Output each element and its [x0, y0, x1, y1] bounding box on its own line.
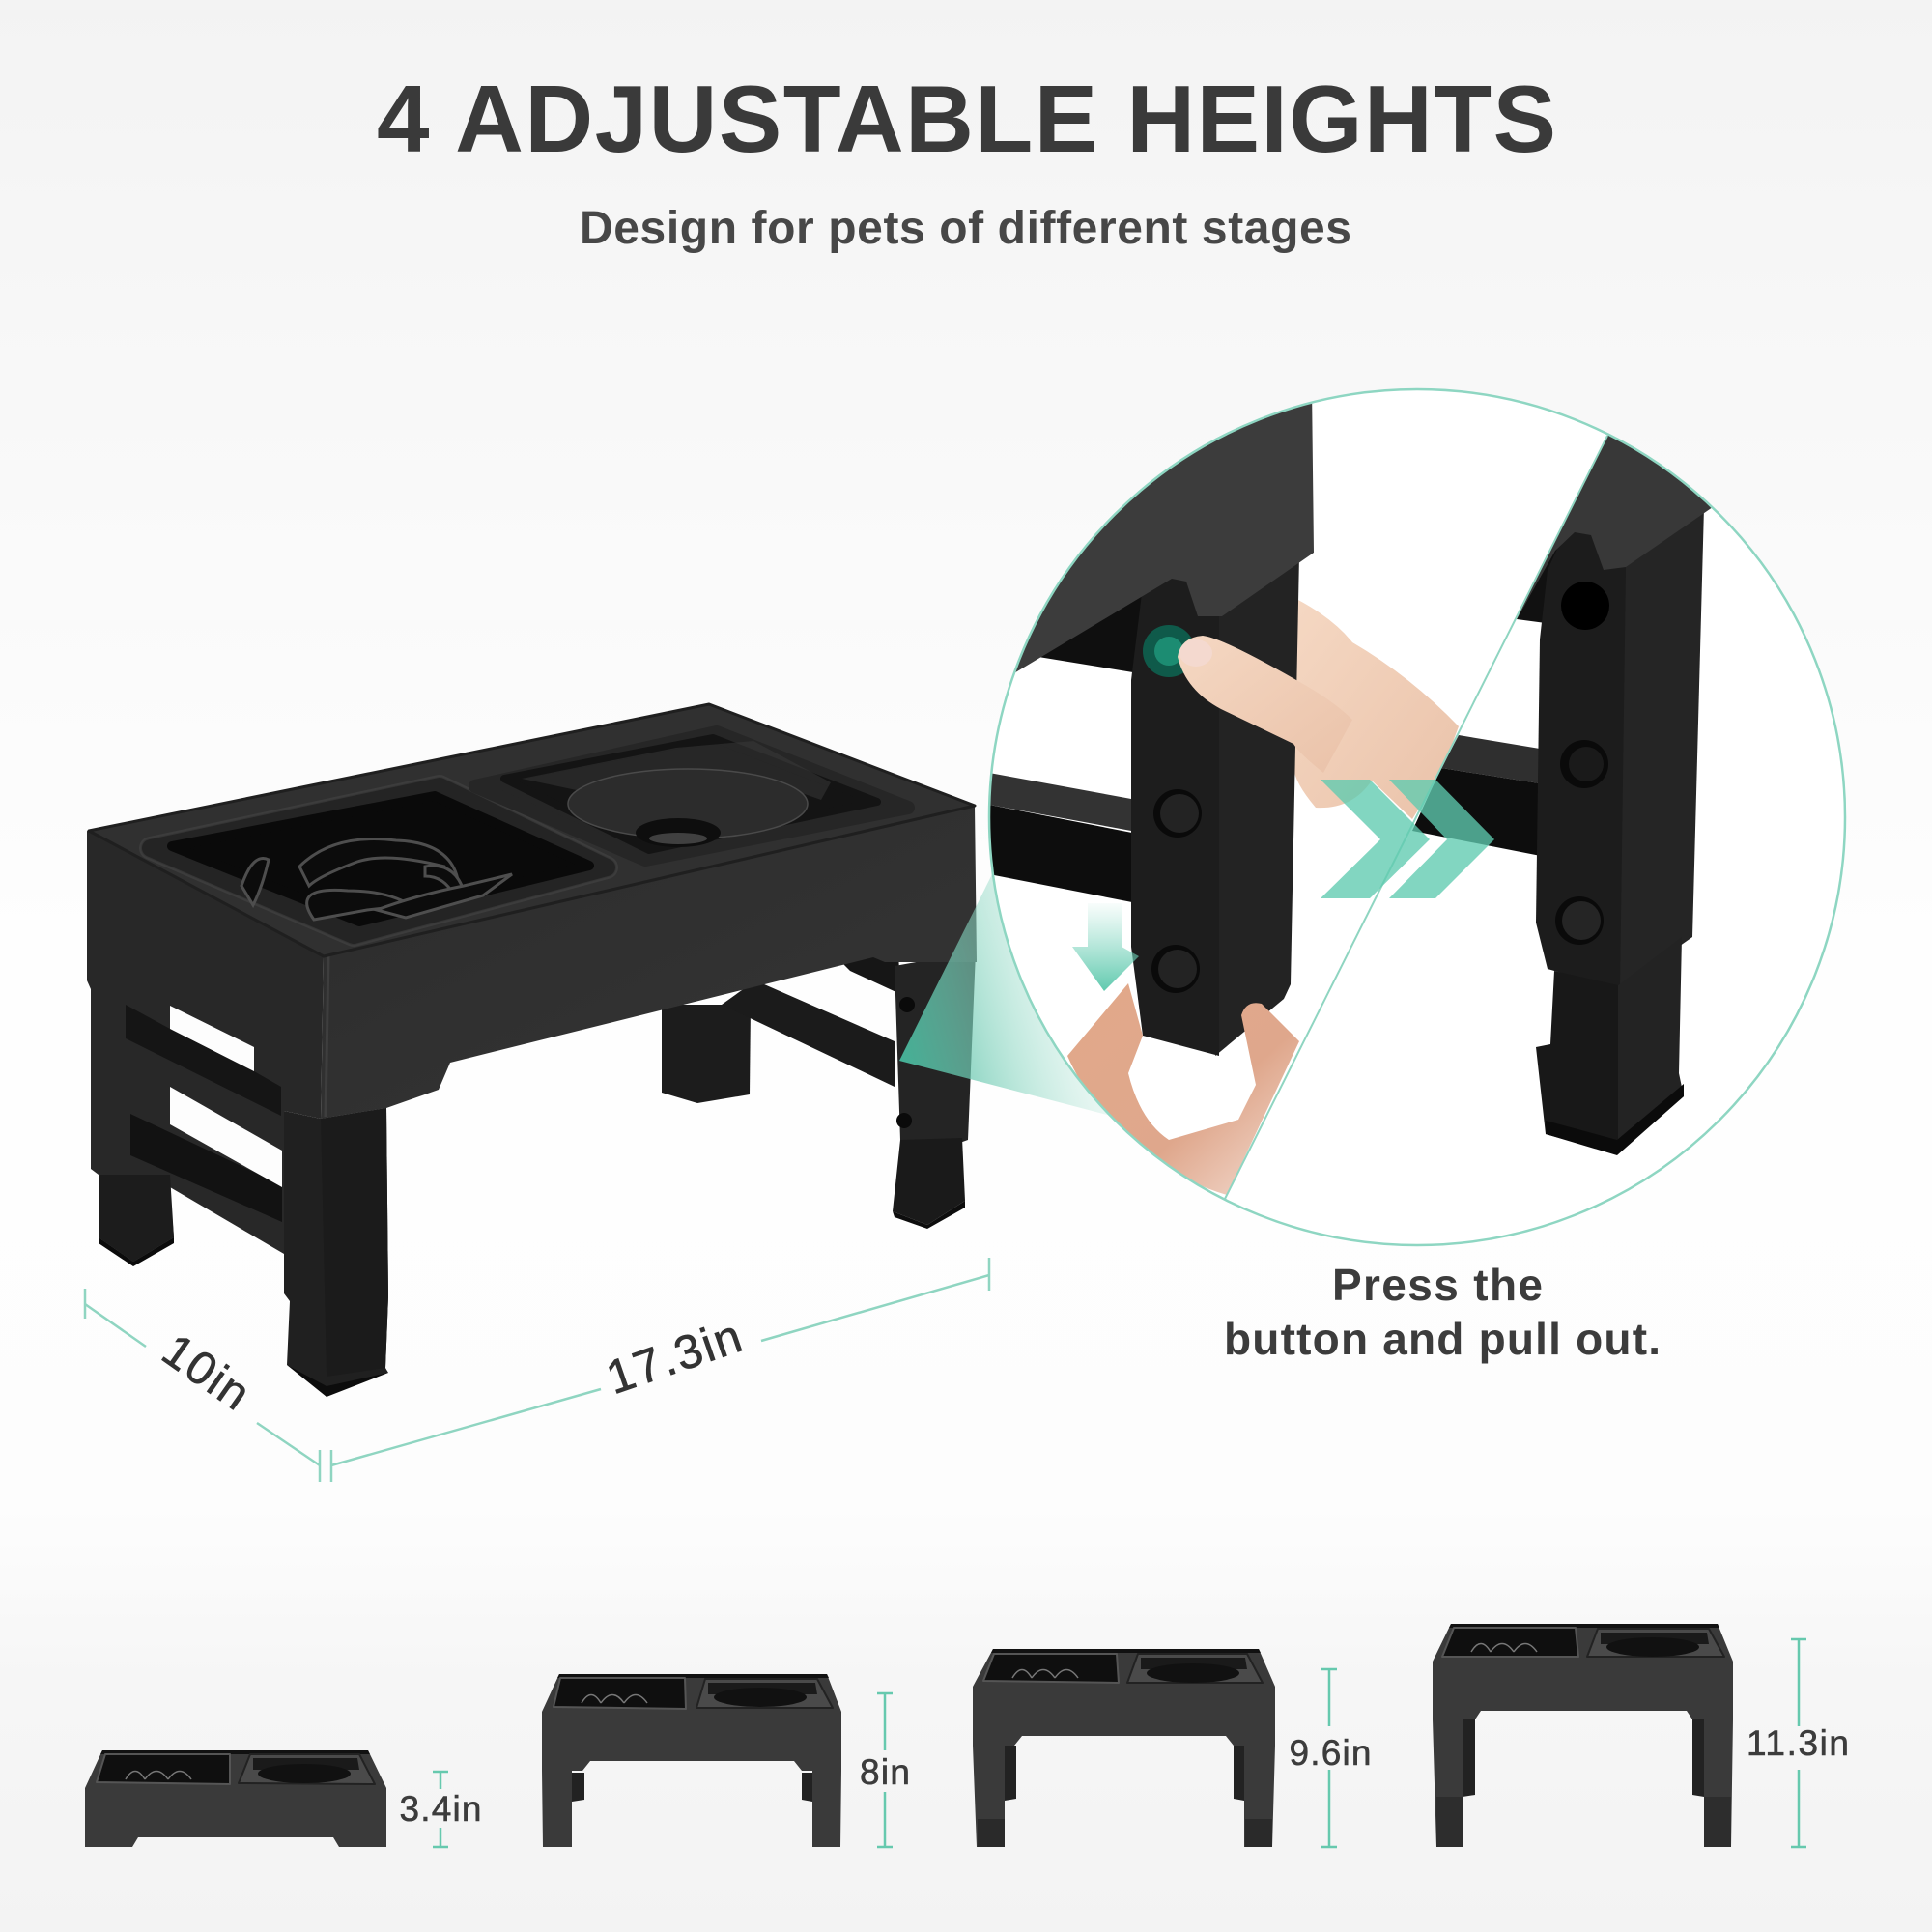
rear right leg [893, 952, 976, 1229]
down arrow [1072, 903, 1139, 991]
height option: 8in: 8in [860, 1752, 910, 1792]
dimension: 17.3in [331, 1258, 989, 1482]
height option: 11.3in [1433, 1624, 1849, 1847]
table body [1016, 404, 1314, 672]
caption: press the button: button and pull out. [1224, 1314, 1661, 1364]
double chevron arrow [1321, 780, 1494, 898]
dimension marker [433, 1772, 448, 1847]
crossbar shading [126, 1005, 281, 1116]
caption: press the button: Press the [1332, 1260, 1543, 1310]
lower leg [1618, 945, 1684, 1140]
leg buttons [1561, 582, 1609, 630]
left bowl: slow feeder [151, 786, 607, 935]
circular detail panel [966, 367, 1845, 1245]
front apron [321, 806, 977, 1119]
crossbars [989, 773, 1131, 831]
openings [170, 1006, 254, 1071]
crossbar [1441, 735, 1546, 784]
left half: pressing the button [966, 367, 1459, 1195]
leg buttons [1153, 789, 1202, 838]
dimension marker [1321, 1669, 1337, 1847]
upper leg front [1536, 522, 1626, 989]
title: 4 ADJUSTABLE HEIGHTS [377, 66, 1556, 172]
top deck [89, 704, 975, 956]
left side panel and legs [87, 831, 324, 1266]
height option: 3.4in: 3.4in [400, 1789, 481, 1829]
right bowl: water dish [475, 732, 908, 860]
caption: press the button [1224, 1260, 1661, 1364]
upper leg side [1618, 507, 1704, 989]
height option: 8in [542, 1674, 910, 1847]
height option: 9.6in [973, 1649, 1372, 1847]
subtitle: Design for pets of different stages [580, 203, 1351, 254]
pressed button glow [1143, 625, 1195, 677]
height option: 9.6in: 9.6in [1289, 1733, 1372, 1773]
dimension: 10in: 10in [153, 1324, 261, 1421]
rear bar [722, 980, 895, 1087]
finger [1178, 636, 1352, 773]
leg side [1215, 555, 1299, 1056]
diagonal divider [1225, 436, 1607, 1199]
lower hand pinching [1067, 983, 1299, 1195]
height option: 11.3in: 11.3in [1747, 1723, 1849, 1763]
rear middle leg [662, 1005, 751, 1103]
hand behind leg [1293, 599, 1459, 819]
dimension: 17.3in: 17.3in [600, 1310, 750, 1405]
right half: extended leg [1412, 425, 1719, 1155]
height option: 3.4in [85, 1750, 481, 1847]
leg front [1131, 570, 1219, 1056]
teal magnifier beam [899, 865, 1111, 1116]
front-left leg [284, 1108, 388, 1397]
dimension marker [1791, 1639, 1806, 1847]
main product: elevated pet feeder stand [87, 704, 977, 1397]
dimension: 10in [85, 1289, 320, 1482]
table body [1517, 425, 1719, 619]
dimension marker [877, 1693, 893, 1847]
